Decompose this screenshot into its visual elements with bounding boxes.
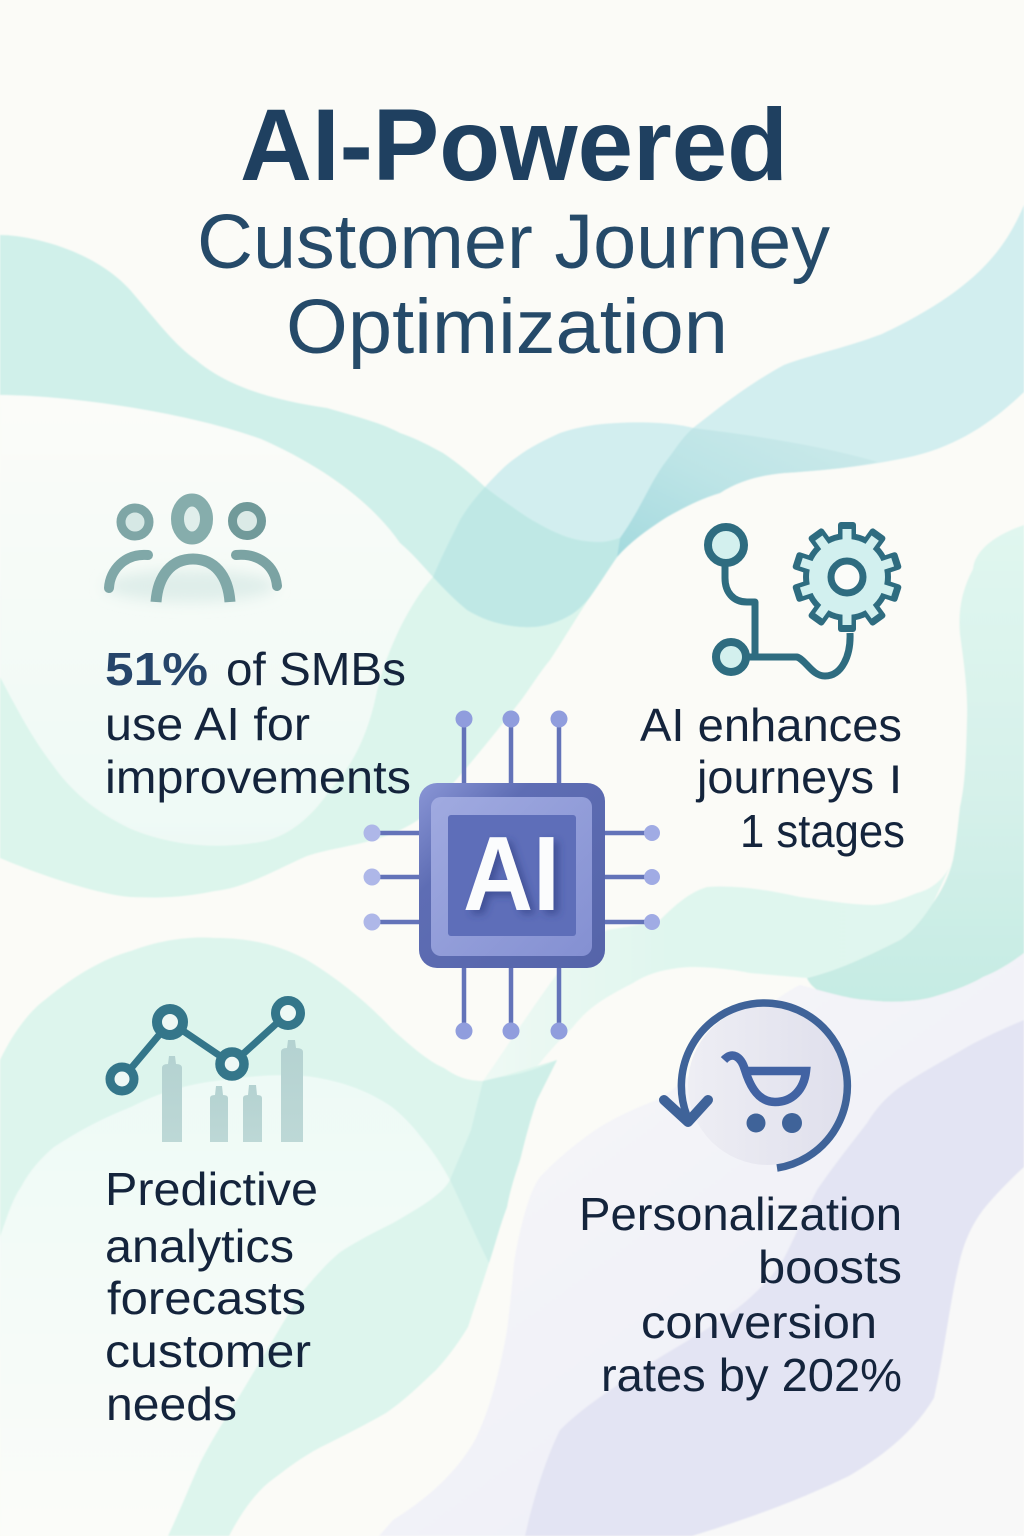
gear [792, 522, 902, 632]
icon: three people [104, 500, 277, 602]
text: personalization: rates by 202% [601, 1349, 902, 1401]
wave: darker lavender [525, 1020, 1024, 1536]
text: predictive analytics: Predictive [105, 1163, 318, 1215]
title [197, 88, 830, 370]
text: predictive analytics: needs [106, 1378, 237, 1430]
chip body [419, 783, 605, 968]
text: AI enhances journeys [640, 699, 905, 857]
wave: overlap of teal bands [433, 487, 620, 627]
icon: shopping cart with circular arrow [664, 1003, 848, 1168]
chip pins [380, 725, 645, 1030]
text: predictive analytics: customer [105, 1325, 311, 1377]
text: 51% of SMBs: of SMBs [226, 643, 406, 695]
wave: pale lavender [379, 953, 1024, 1536]
text: personalization: conversion [641, 1296, 877, 1348]
wave: light mint right of chip [483, 860, 953, 1081]
text: predictive analytics [105, 1163, 318, 1430]
wave: dark teal ribbon [617, 428, 878, 557]
icon: line and bar chart [110, 1000, 303, 1142]
wave: cream lower right corner [692, 1167, 1024, 1536]
text: personalization [579, 1188, 902, 1401]
text: AI enhances journeys: 1 stages [740, 805, 905, 857]
text: 51% of SMBs: use AI for [105, 698, 310, 750]
wave: teal upper left [0, 235, 620, 627]
text: personalization: boosts [758, 1241, 902, 1293]
wave: mint band behind the upper-left stat [0, 395, 590, 897]
heading line: Customer Journey: Customer Journey [197, 199, 830, 285]
wave: lower-left pale area [0, 1075, 450, 1536]
wave: pale area behind the upper-left stat [0, 395, 433, 846]
bars [162, 1040, 303, 1142]
icon: journey path with gear [708, 522, 902, 676]
text: 51% of SMBs: 51% [105, 643, 208, 695]
text: 51% of SMBs [105, 643, 411, 803]
text: personalization: Personalization [579, 1188, 902, 1240]
trend line [110, 1000, 300, 1091]
heading line: Optimization: Optimization [286, 284, 728, 370]
text: AI enhances journeys: ו [889, 751, 902, 803]
chip label: AI [463, 815, 560, 933]
text: AI enhances journeys: journeys [695, 751, 874, 803]
gear fill [800, 529, 894, 625]
gear outline [792, 522, 902, 632]
wave: teal right edge [807, 525, 1024, 1002]
wave: teal upper right and lens [433, 205, 1024, 597]
text: predictive analytics: forecasts [107, 1272, 306, 1324]
text: 51% of SMBs: improvements [105, 751, 411, 803]
text: predictive analytics: analytics [105, 1220, 294, 1272]
chip pin ends [364, 710, 660, 1040]
text: AI enhances journeys: AI enhances [640, 699, 902, 751]
heading line: AI-Powered: AI-Powered [240, 88, 788, 202]
wave: darker mint strip [450, 1060, 557, 1263]
icon: AI chip [364, 710, 660, 1040]
wave: lower-left mint [0, 938, 557, 1536]
